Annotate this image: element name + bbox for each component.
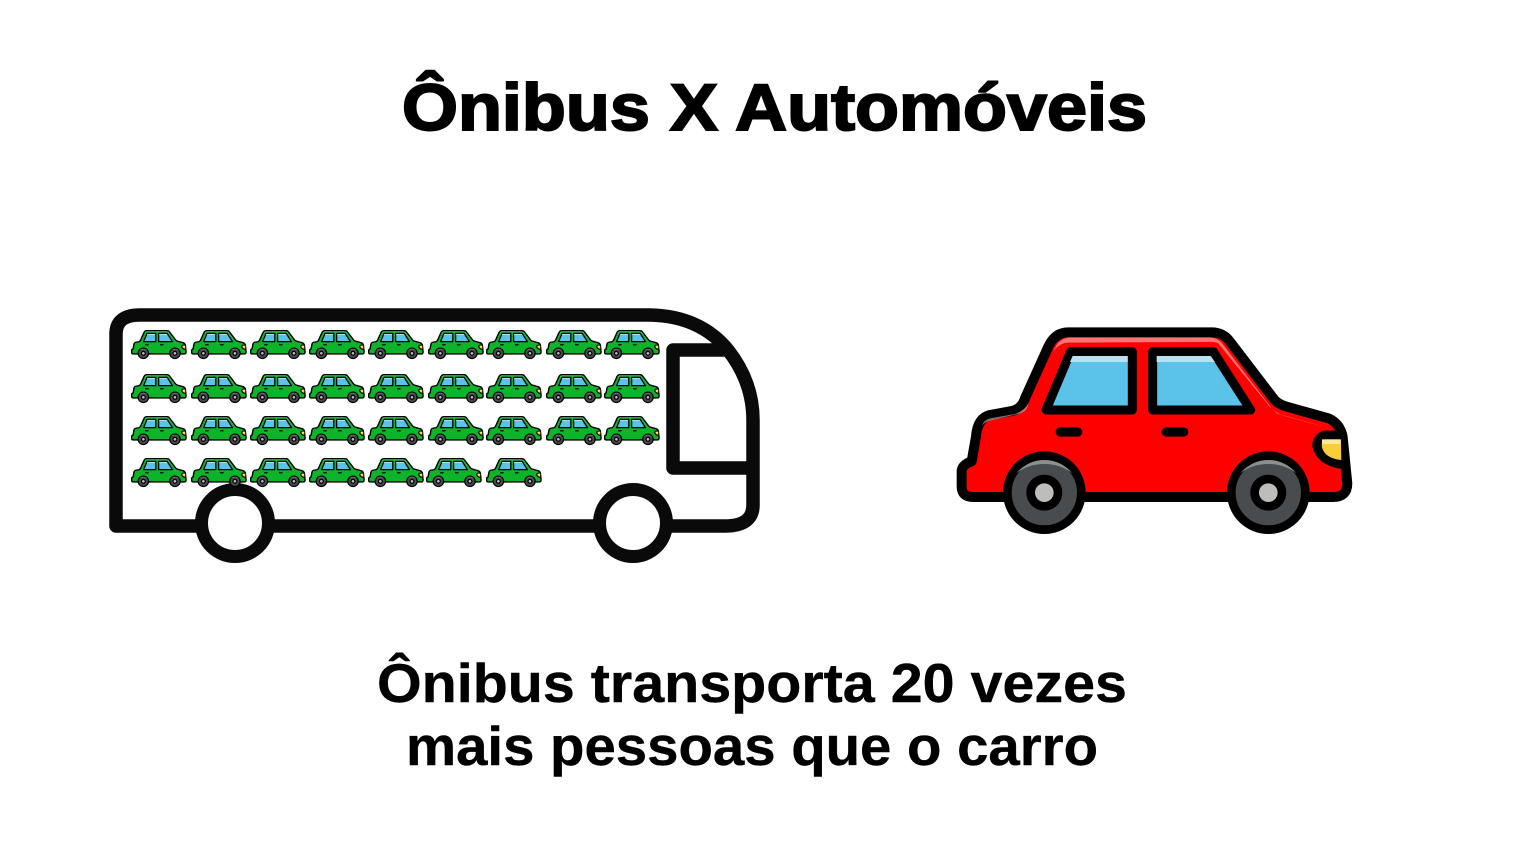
icon: large red car	[962, 332, 1347, 530]
row 4 of small cars	[132, 459, 541, 487]
row 1 of small cars	[132, 331, 659, 359]
row 3 of small cars	[132, 417, 659, 445]
icon: bus filled with small green cars	[116, 315, 753, 556]
rear wheel	[202, 490, 268, 556]
row 2 of small cars	[132, 375, 659, 403]
caption line 1: Ônibus transporta 20 vezes	[377, 652, 1127, 714]
bus outline	[116, 315, 753, 526]
caption line 2: mais pessoas que o carro	[406, 715, 1098, 777]
title: Ônibus X Automóveis	[402, 70, 1147, 144]
caption	[377, 652, 1127, 777]
front wheel	[600, 490, 666, 556]
